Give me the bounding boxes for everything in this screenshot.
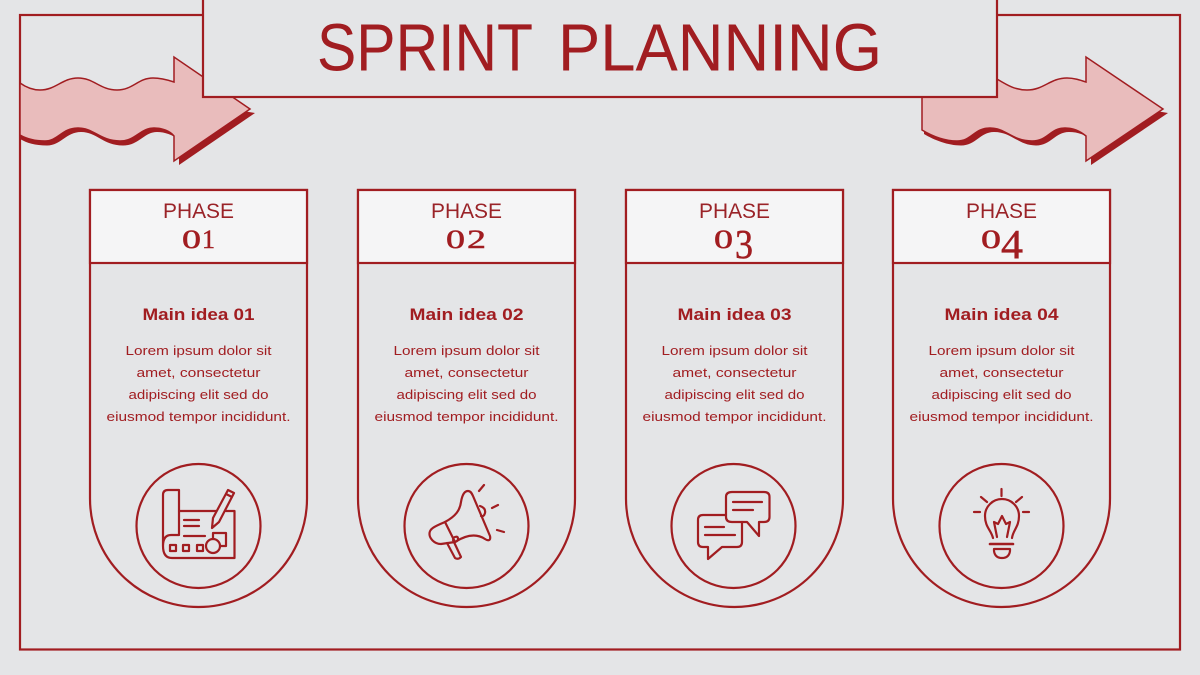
phase 03 header: 0 bbox=[714, 224, 733, 254]
icon: blueprint and pencil bbox=[136, 464, 260, 588]
text block 03: adipiscing elit sed do bbox=[664, 387, 804, 402]
phase 04 header: 4 bbox=[1001, 221, 1023, 267]
main idea 01: Main idea 01 bbox=[142, 305, 254, 324]
phase 04 header bbox=[893, 190, 1110, 267]
title bbox=[317, 10, 882, 86]
arrow: right wavy bbox=[922, 57, 1168, 165]
icon: light bulb bbox=[940, 464, 1064, 588]
phase 04 header: PHASE bbox=[966, 200, 1037, 223]
text block 04: amet, consectetur bbox=[940, 365, 1064, 380]
phase 01 header bbox=[90, 190, 307, 263]
phase 03 header: PHASE bbox=[699, 200, 770, 223]
phase 01 header: PHASE bbox=[163, 200, 234, 223]
text block 02: Lorem ipsum dolor sit bbox=[394, 343, 540, 358]
panel: phase 04 bbox=[893, 190, 1110, 607]
main idea 04: Main idea 04 bbox=[944, 305, 1059, 324]
icon: chat bubbles bbox=[672, 464, 796, 588]
panel: phase 03 bbox=[626, 190, 843, 607]
panel: phase 01 bbox=[90, 190, 307, 607]
main idea 03: Main idea 03 bbox=[678, 305, 792, 324]
main idea 02: Main idea 02 bbox=[410, 305, 524, 324]
phase 01 header: 1 bbox=[202, 224, 215, 254]
phase 03 header: 3 bbox=[735, 221, 753, 267]
text block 04: adipiscing elit sed do bbox=[932, 387, 1072, 402]
title: SPRINT bbox=[317, 10, 533, 86]
text block 01: Lorem ipsum dolor sit bbox=[126, 343, 272, 358]
text block 04: eiusmod tempor incididunt. bbox=[910, 409, 1094, 424]
panel: phase 02 bbox=[358, 190, 575, 607]
title banner bbox=[203, 0, 997, 97]
text block 01 bbox=[106, 343, 290, 424]
text block 03: Lorem ipsum dolor sit bbox=[662, 343, 808, 358]
text block 03: amet, consectetur bbox=[672, 365, 797, 380]
text block 04: Lorem ipsum dolor sit bbox=[928, 343, 1075, 358]
phase 02 header: PHASE bbox=[431, 200, 502, 223]
phase 04 header: 0 bbox=[981, 224, 1001, 254]
phase 03 header bbox=[626, 190, 843, 267]
icon: megaphone bbox=[404, 464, 528, 588]
text block 02: adipiscing elit sed do bbox=[396, 387, 536, 402]
text block 02 bbox=[374, 343, 558, 424]
arrow: left wavy bbox=[20, 57, 255, 165]
text block 03 bbox=[642, 343, 826, 424]
title: PLANNING bbox=[558, 10, 882, 86]
text block 01: eiusmod tempor incididunt. bbox=[106, 409, 290, 424]
text block 01: adipiscing elit sed do bbox=[128, 387, 268, 402]
phase 01 header: 0 bbox=[182, 224, 201, 254]
text block 03: eiusmod tempor incididunt. bbox=[642, 409, 826, 424]
text block 04 bbox=[910, 343, 1094, 424]
phase 02 header bbox=[358, 190, 575, 263]
text block 01: amet, consectetur bbox=[136, 365, 261, 380]
phase 02 header: 2 bbox=[467, 224, 486, 254]
text block 02: amet, consectetur bbox=[404, 365, 529, 380]
phase 02 header: 0 bbox=[446, 224, 465, 254]
text block 02: eiusmod tempor incididunt. bbox=[374, 409, 558, 424]
